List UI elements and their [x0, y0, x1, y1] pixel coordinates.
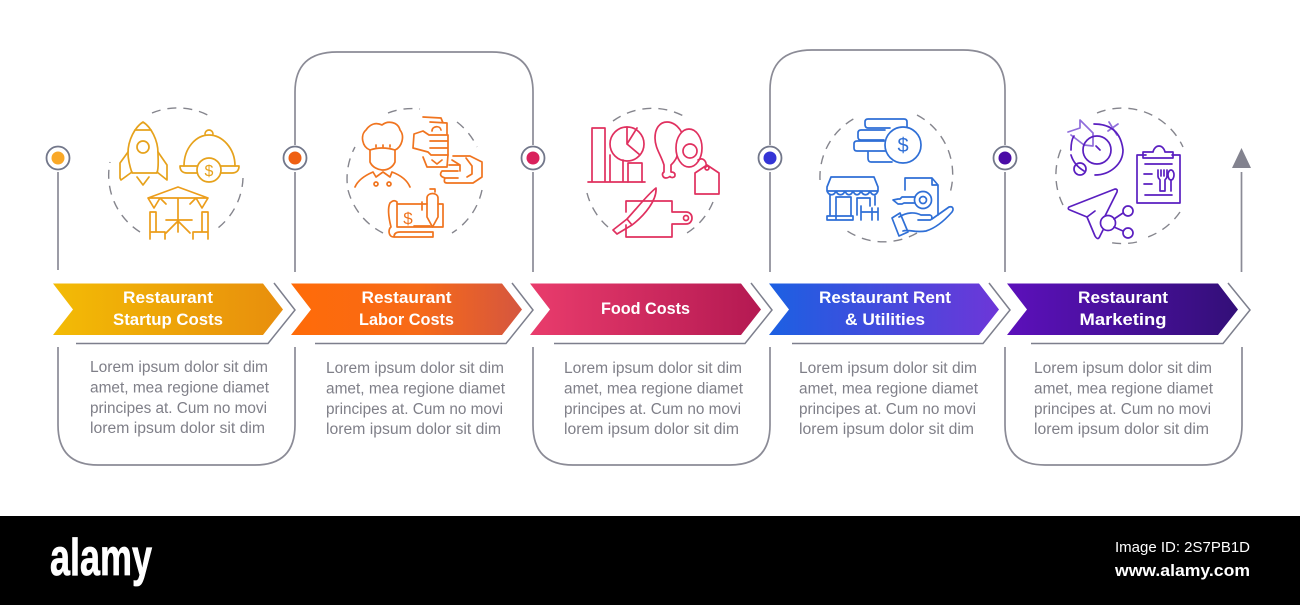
body text 5: lorem ipsum dolor sit dim: [1034, 421, 1209, 438]
body text 2: Lorem ipsum dolor sit dim: [326, 360, 504, 377]
body text 4: principes at. Cum no movi: [799, 401, 976, 418]
body text 1: Lorem ipsum dolor sit dim: [90, 359, 268, 376]
body text 2: principes at. Cum no movi: [326, 401, 503, 418]
body text 3: [564, 360, 744, 438]
body text 1: lorem ipsum dolor sit dim: [90, 420, 265, 437]
step 1 arrow: Restaurant Startup Costs: [53, 283, 295, 344]
body text 5: principes at. Cum no movi: [1034, 401, 1211, 418]
alamy logo wordmark: alamy: [50, 529, 152, 587]
body text 4: lorem ipsum dolor sit dim: [799, 421, 974, 438]
body text 1: [90, 359, 270, 437]
body text 2: [326, 360, 506, 438]
step 4 arrow: Restaurant Rent and Utilities: [769, 283, 1010, 344]
icon group: restaurant labor costs: $: [403, 209, 413, 228]
icon group: restaurant startup costs: $: [205, 163, 214, 180]
image id: Image ID: 2S7PB1D: [1115, 539, 1250, 556]
icon group: restaurant rent and utilities: $: [897, 135, 909, 157]
icon group: restaurant rent and utilities: [820, 115, 953, 242]
timeline marker 1: [46, 146, 70, 170]
icon group: restaurant marketing: [1056, 108, 1183, 244]
step 2 arrow: Restaurant Labor Costs: Labor Costs: [359, 310, 454, 329]
body text 3: amet, mea regione diamet: [564, 380, 744, 398]
step 4 arrow: Restaurant Rent and Utilities: Restaurant Rent: [819, 288, 951, 307]
step 2 arrow: Restaurant Labor Costs: Restaurant: [362, 288, 452, 307]
body text 5: Lorem ipsum dolor sit dim: [1034, 360, 1212, 377]
body text 1: amet, mea regione diamet: [90, 380, 270, 396]
step 1 arrow: Restaurant Startup Costs: Startup Costs: [113, 310, 223, 329]
connector line frame: [58, 50, 1242, 465]
step 2 arrow: Restaurant Labor Costs: [291, 283, 533, 344]
step 3 arrow: Food Costs: [530, 283, 772, 344]
body text 2: amet, mea regione diamet: [326, 380, 506, 398]
body text 4: amet, mea regione diamet: [799, 380, 979, 398]
body text 5: [1034, 360, 1214, 438]
timeline arrow pointing up: [1232, 148, 1251, 272]
body text 3: principes at. Cum no movi: [564, 401, 741, 418]
timeline marker 4: [758, 146, 782, 170]
icon group: food costs: [587, 108, 719, 237]
timeline marker 5: [994, 146, 1016, 170]
timeline marker 3: [522, 146, 544, 170]
body text 2: lorem ipsum dolor sit dim: [326, 421, 501, 438]
step 3 arrow: Food Costs: Food Costs: [601, 299, 690, 318]
website: www.alamy.com: [1114, 562, 1250, 580]
step 4 arrow: Restaurant Rent and Utilities: & Utilities: [845, 310, 925, 329]
body text 4: [799, 360, 979, 438]
body text 3: Lorem ipsum dolor sit dim: [564, 360, 742, 377]
step 1 arrow: Restaurant Startup Costs: Restaurant: [123, 288, 213, 307]
step 5 arrow: Restaurant Marketing: [1007, 283, 1250, 344]
watermark footer bar: [0, 516, 1300, 605]
step 5 arrow: Restaurant Marketing: Restaurant: [1078, 288, 1168, 307]
icon group: restaurant startup costs: [109, 108, 243, 239]
body text 1: principes at. Cum no movi: [90, 400, 267, 417]
body text 4: Lorem ipsum dolor sit dim: [799, 360, 977, 377]
icon group: restaurant labor costs: [347, 109, 482, 237]
step 5 arrow: Restaurant Marketing: Marketing: [1080, 310, 1166, 329]
body text 3: lorem ipsum dolor sit dim: [564, 421, 739, 438]
timeline marker 2: [284, 146, 306, 170]
body text 5: amet, mea regione diamet: [1034, 380, 1214, 398]
